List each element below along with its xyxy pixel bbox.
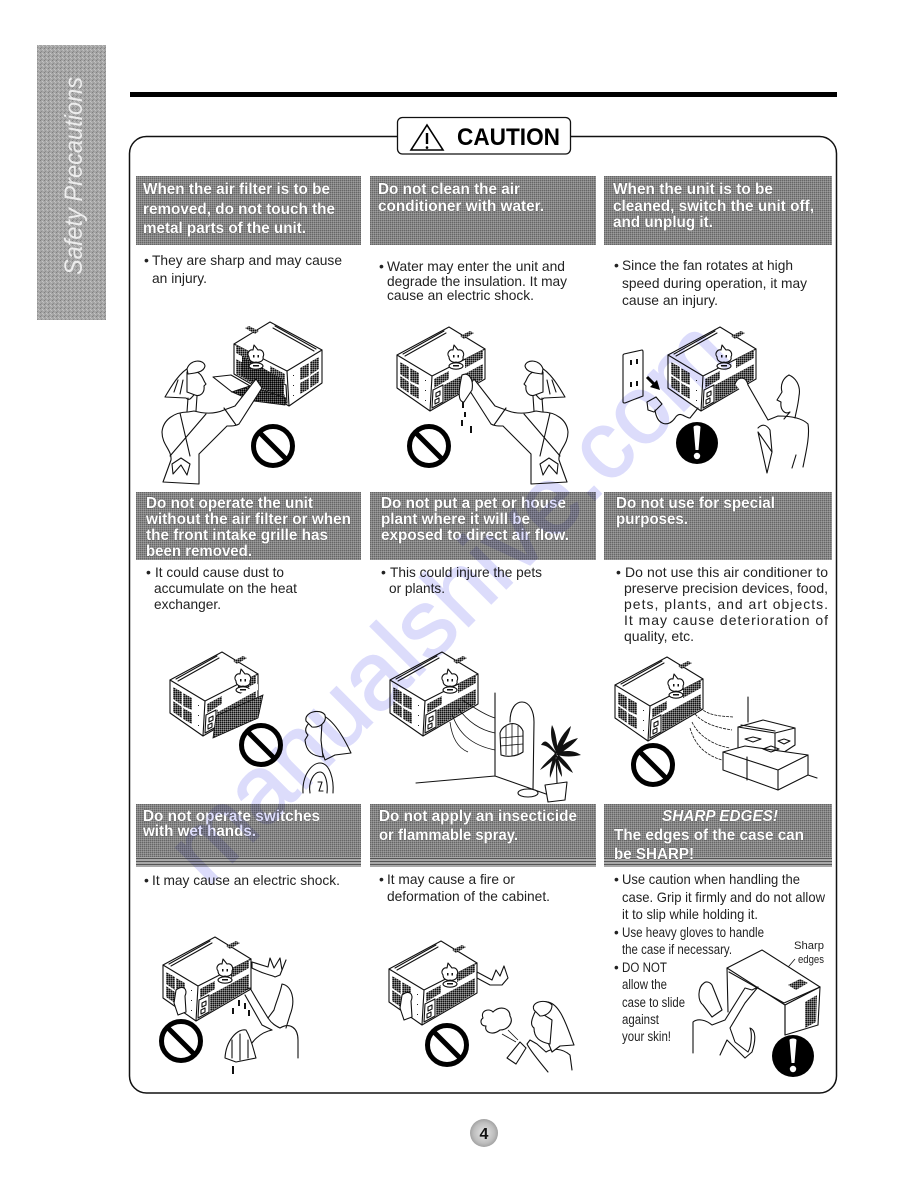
- callout: sharp edges: Sharp: [794, 940, 824, 952]
- body text: or plants.: [389, 580, 445, 596]
- body text: •: [614, 871, 619, 887]
- header: Do not use for special: [616, 495, 775, 512]
- header: The edges of the case can: [614, 827, 804, 844]
- header: Do not operate the unit: [146, 495, 314, 512]
- header: [136, 804, 361, 867]
- icon: prohibited: [634, 746, 672, 784]
- panel: do not operate without filter: [136, 492, 361, 793]
- body text: deformation of the cabinet.: [387, 888, 550, 904]
- body text: •: [381, 564, 386, 580]
- header: Do not operate switches: [143, 808, 320, 825]
- panel: pets and plants: [370, 492, 596, 802]
- header: conditioner with water.: [378, 198, 544, 215]
- body text: •: [144, 252, 149, 268]
- body text: preserve precision devices, food,: [624, 580, 828, 596]
- body text: [379, 871, 550, 904]
- body text: it to slip while holding it.: [622, 906, 758, 922]
- body text: pets, plants, and art objects.: [624, 596, 828, 612]
- top rule: [130, 92, 837, 97]
- caution frame: [130, 136, 836, 1093]
- body text: exchanger.: [154, 596, 221, 612]
- page number: [470, 1119, 498, 1147]
- icon: prohibited: [242, 726, 280, 764]
- side tab: [37, 45, 106, 320]
- body text: against: [622, 1012, 659, 1027]
- header: cleaned, switch the unit off,: [613, 198, 814, 215]
- header: When the unit is to be: [613, 181, 773, 198]
- body text: accumulate on the heat: [154, 580, 297, 596]
- body text: •: [146, 564, 151, 580]
- header: and unplug it.: [613, 214, 713, 231]
- header: [604, 492, 832, 560]
- panel: special purposes: [604, 492, 832, 790]
- body text: •: [614, 925, 619, 940]
- illustration: birdcage and plant: [390, 652, 581, 802]
- header: SHARP EDGES!: [662, 808, 779, 825]
- header: purposes.: [616, 511, 688, 528]
- body text: degrade the insulation. It may: [387, 273, 567, 289]
- callout: sharp edges: edges: [798, 954, 824, 966]
- body text: •: [614, 960, 619, 975]
- header: When the air filter is to be: [143, 181, 330, 198]
- panel: wet hands: [136, 804, 361, 1074]
- body text: Use heavy gloves to handle: [622, 925, 764, 940]
- icon: prohibited: [162, 1022, 200, 1060]
- illustration: grille removed: [170, 652, 351, 793]
- illustration: wet hands at unit: [163, 937, 298, 1074]
- body text: It could cause dust to: [155, 564, 284, 580]
- body text: case to slide: [622, 995, 685, 1010]
- header: Do not put a pet or house: [381, 495, 566, 512]
- body text: •: [616, 564, 621, 580]
- illustration: woman removing filter: [162, 322, 322, 484]
- header: [136, 176, 361, 245]
- header: [370, 492, 596, 560]
- header: metal parts of the unit.: [143, 220, 306, 237]
- body text: It may cause a fire or: [387, 871, 515, 887]
- header: [370, 804, 596, 867]
- header: or flammable spray.: [379, 827, 518, 844]
- body text: Since the fan rotates at high: [622, 257, 793, 273]
- body text: case. Grip it firmly and do not allow: [622, 889, 826, 905]
- body text: your skin!: [622, 1029, 671, 1044]
- illustration: spraying insecticide: [389, 941, 574, 1072]
- header: [370, 176, 596, 245]
- header: removed, do not touch the: [143, 201, 335, 218]
- header: [604, 804, 832, 867]
- header: plant where it will be: [381, 511, 530, 528]
- body text: [144, 252, 342, 286]
- heading: caution: CAUTION: [457, 124, 560, 151]
- illustration: aquarium on cabinet: [615, 657, 817, 790]
- body text: [146, 564, 297, 612]
- body text: [379, 258, 567, 303]
- body text: speed during operation, it may: [622, 275, 807, 291]
- header: Do not clean the air: [378, 181, 520, 198]
- callout: sharp edges: [767, 940, 824, 992]
- icon: prohibited: [254, 426, 292, 466]
- body text: cause an injury.: [622, 292, 718, 308]
- panel: do not clean with water: [370, 176, 596, 484]
- body text: [381, 564, 542, 596]
- watermark: manualshive.com: [146, 298, 751, 903]
- body text: Do not use this air conditioner to: [625, 564, 828, 580]
- icon: mandatory action: [772, 1035, 814, 1077]
- body text: [614, 871, 826, 1044]
- header: exposed to direct air flow.: [381, 527, 569, 544]
- page number: 4: [480, 1126, 489, 1143]
- body text: [614, 257, 807, 308]
- body text: It may cause deterioration of: [624, 612, 828, 628]
- panel: switch off and unplug: [604, 176, 832, 473]
- caution badge: [398, 118, 570, 154]
- illustration: handling case: [693, 950, 820, 1058]
- header: Do not apply an insecticide: [379, 808, 577, 825]
- body text: It may cause an electric shock.: [152, 872, 340, 888]
- header: [604, 176, 832, 245]
- icon: prohibited: [428, 1026, 466, 1064]
- icon: prohibited: [410, 426, 448, 466]
- body text: Use caution when handling the: [622, 871, 800, 887]
- body text: They are sharp and may cause: [152, 252, 342, 268]
- header: been removed.: [146, 543, 252, 560]
- header: with wet hands.: [142, 823, 256, 840]
- icon: mandatory action: [676, 422, 718, 464]
- body text: Water may enter the unit and: [387, 258, 565, 274]
- body text: •: [144, 872, 149, 888]
- header: without the air filter or when: [145, 511, 351, 528]
- body text: [616, 564, 828, 644]
- illustration: woman wiping unit: [397, 327, 568, 484]
- panel: insecticide spray: [370, 804, 596, 1072]
- body text: cause an electric shock.: [387, 287, 534, 303]
- body text: DO NOT: [622, 960, 667, 975]
- side tab label: Safety Precautions: [60, 77, 88, 275]
- header: be SHARP!: [614, 846, 694, 863]
- body text: •: [379, 258, 384, 274]
- body text: This could injure the pets: [390, 564, 542, 580]
- body text: •: [614, 257, 619, 273]
- body text: the case if necessary.: [622, 942, 732, 957]
- panel: sharp edges: [604, 804, 832, 1077]
- body text: quality, etc.: [624, 628, 694, 644]
- header: [136, 492, 361, 560]
- panel: air filter removal: [136, 176, 361, 484]
- body text: an injury.: [152, 270, 207, 286]
- body text: allow the: [622, 977, 667, 992]
- icon: warning triangle: [411, 125, 443, 150]
- body text: •: [379, 871, 384, 887]
- header: the front intake grille has: [146, 527, 328, 544]
- illustration: unplugging unit: [623, 327, 809, 473]
